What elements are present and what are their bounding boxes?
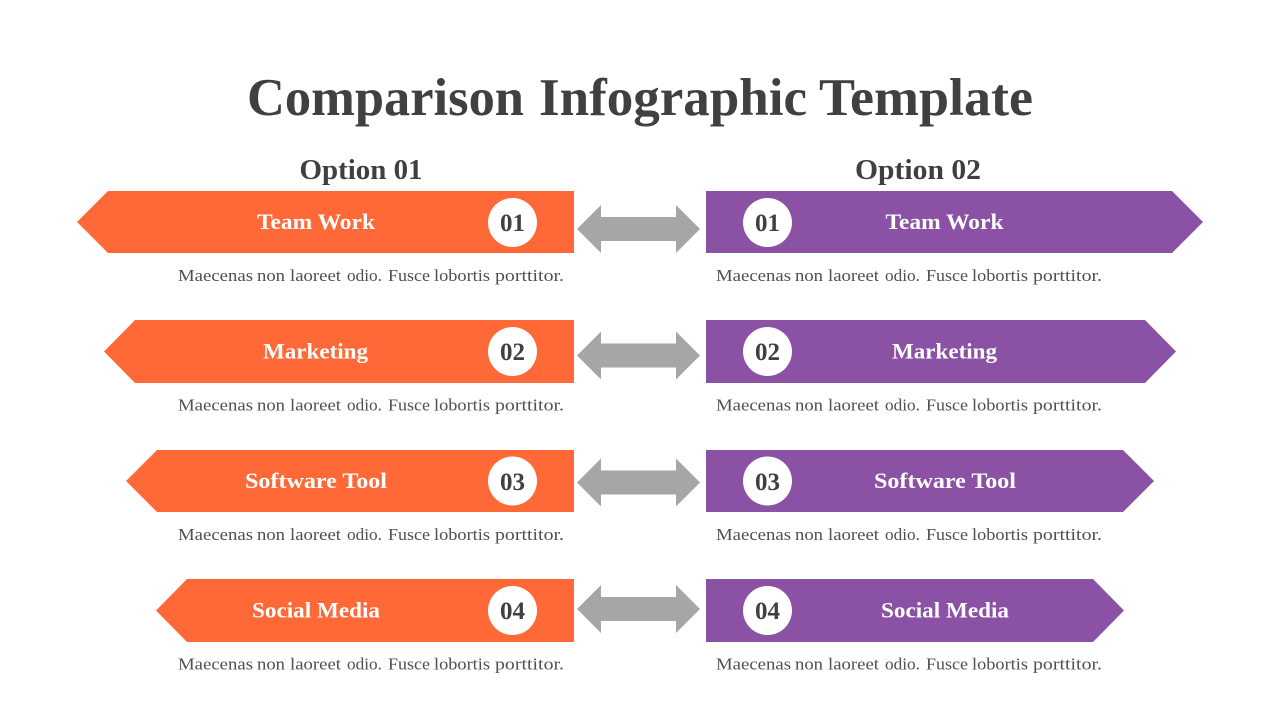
row 3 right: software tool: lobortis bbox=[972, 525, 1028, 544]
row 4 left: social media: odio. bbox=[347, 654, 382, 674]
row 4 right: social media: Maecenas bbox=[716, 654, 791, 674]
row 4 left: social media bbox=[156, 579, 574, 674]
row 2 left: marketing: porttitor. bbox=[495, 396, 564, 414]
row 2 right: marketing: lobortis bbox=[972, 396, 1028, 414]
row 1 left: team work: odio. bbox=[347, 266, 382, 285]
row 1 right: team work: 01 bbox=[755, 210, 780, 237]
row 3 right: software tool: porttitor. bbox=[1033, 525, 1102, 544]
row 3 right: software tool: 03 bbox=[755, 469, 780, 496]
row 1 right: team work: laoreet bbox=[828, 266, 879, 285]
row 2 right: marketing bbox=[706, 320, 1176, 414]
row 3 right: software tool: Fusce bbox=[926, 525, 968, 544]
row 2 left: marketing: Fusce bbox=[388, 396, 430, 414]
heading: option 02: Option 02 bbox=[855, 154, 981, 186]
row 3 left: software tool: Fusce bbox=[388, 525, 430, 544]
row 3 left: software tool: odio. bbox=[347, 525, 382, 544]
row 3 left: software tool: porttitor. bbox=[495, 525, 564, 544]
row 1 right: team work: Maecenas bbox=[716, 266, 791, 285]
arrow: row 3 bbox=[577, 458, 700, 506]
row 4 right: social media: 04 bbox=[755, 598, 780, 625]
row 4 right: social media: porttitor. bbox=[1033, 654, 1102, 674]
row 3 right: software tool: Maecenas bbox=[716, 525, 791, 544]
row 4 right: social media: odio. bbox=[885, 654, 920, 674]
row 1 left: team work: Maecenas bbox=[178, 266, 253, 285]
row 3 left: software tool bbox=[126, 450, 574, 544]
row 3 left: software tool: 03 bbox=[500, 469, 525, 496]
row 1 right: team work: Fusce bbox=[926, 266, 968, 285]
row 1 right: team work: non bbox=[795, 266, 823, 285]
row 2 right: marketing: odio. bbox=[885, 396, 920, 414]
row 2 right: marketing: Fusce bbox=[926, 396, 968, 414]
row 1 left: team work: 01 bbox=[500, 210, 525, 237]
row 4 left: social media: non bbox=[257, 654, 285, 674]
row 2 right: marketing: Marketing bbox=[892, 338, 997, 364]
row 2 left: marketing: 02 bbox=[500, 339, 525, 366]
row 1 right: team work: Team Work bbox=[886, 209, 1004, 234]
row 3 right: software tool: laoreet bbox=[828, 525, 879, 544]
row 3 left: software tool: non bbox=[257, 525, 285, 544]
row 2 right: marketing: 02 bbox=[755, 339, 780, 366]
row 1 right: team work: porttitor. bbox=[1033, 266, 1102, 285]
row 2 left: marketing: laoreet bbox=[290, 396, 341, 414]
row 4 right: social media: laoreet bbox=[828, 654, 879, 674]
row 3 right: software tool: non bbox=[795, 525, 823, 544]
row 2 left: marketing: Marketing bbox=[263, 338, 368, 364]
row 3 left: software tool: lobortis bbox=[434, 525, 490, 544]
row 4 left: social media: lobortis bbox=[434, 654, 490, 674]
row 1 right: team work: odio. bbox=[885, 266, 920, 285]
row 1 left: team work: laoreet bbox=[290, 266, 341, 285]
row 2 left: marketing bbox=[104, 320, 574, 414]
row 3 right: software tool bbox=[706, 450, 1154, 544]
row 2 left: marketing: odio. bbox=[347, 396, 382, 414]
row 4 right: social media: Fusce bbox=[926, 654, 968, 674]
row 2 right: marketing: laoreet bbox=[828, 396, 879, 414]
title: Comparison bbox=[247, 69, 524, 127]
row 2 left: marketing: non bbox=[257, 396, 285, 414]
row 4 left: social media: porttitor. bbox=[495, 654, 564, 674]
row 4 left: social media: 04 bbox=[500, 598, 526, 625]
row 2 right: marketing: porttitor. bbox=[1033, 396, 1102, 414]
title: Infographic bbox=[539, 69, 807, 127]
row 1 right: team work bbox=[706, 191, 1203, 285]
row 4 right: social media: non bbox=[795, 654, 823, 674]
row 3 right: software tool: Software Tool bbox=[874, 468, 1016, 493]
arrow: row 2 bbox=[577, 332, 700, 380]
row 2 right: marketing: Maecenas bbox=[716, 396, 791, 414]
row 2 right: marketing: non bbox=[795, 396, 823, 414]
row 4 right: social media: lobortis bbox=[972, 654, 1028, 674]
row 2 left: marketing: Maecenas bbox=[178, 396, 253, 414]
heading: option 01: Option 01 bbox=[300, 154, 422, 186]
row 1 left: team work: porttitor. bbox=[495, 266, 564, 285]
row 4 right: social media bbox=[706, 579, 1124, 674]
arrow: row 1 bbox=[577, 205, 700, 253]
title: Template bbox=[819, 69, 1033, 127]
row 3 left: software tool: laoreet bbox=[290, 525, 341, 544]
row 1 left: team work: Fusce bbox=[388, 266, 430, 285]
row 3 left: software tool: Software Tool bbox=[245, 468, 387, 493]
row 4 left: social media: Maecenas bbox=[178, 654, 253, 674]
row 3 right: software tool: odio. bbox=[885, 525, 920, 544]
row 4 left: social media: Social Media bbox=[252, 598, 380, 622]
row 3 left: software tool: Maecenas bbox=[178, 525, 253, 544]
row 2 left: marketing: lobortis bbox=[434, 396, 490, 414]
row 1 right: team work: lobortis bbox=[972, 266, 1028, 285]
row 4 right: social media: Social Media bbox=[881, 598, 1009, 622]
arrow: row 4 bbox=[577, 585, 700, 633]
row 1 left: team work: non bbox=[257, 266, 285, 285]
row 4 left: social media: Fusce bbox=[388, 654, 430, 674]
row 4 left: social media: laoreet bbox=[290, 654, 341, 674]
row 1 left: team work: lobortis bbox=[434, 266, 490, 285]
row 1 left: team work bbox=[77, 191, 574, 285]
row 1 left: team work: Team Work bbox=[257, 209, 376, 234]
